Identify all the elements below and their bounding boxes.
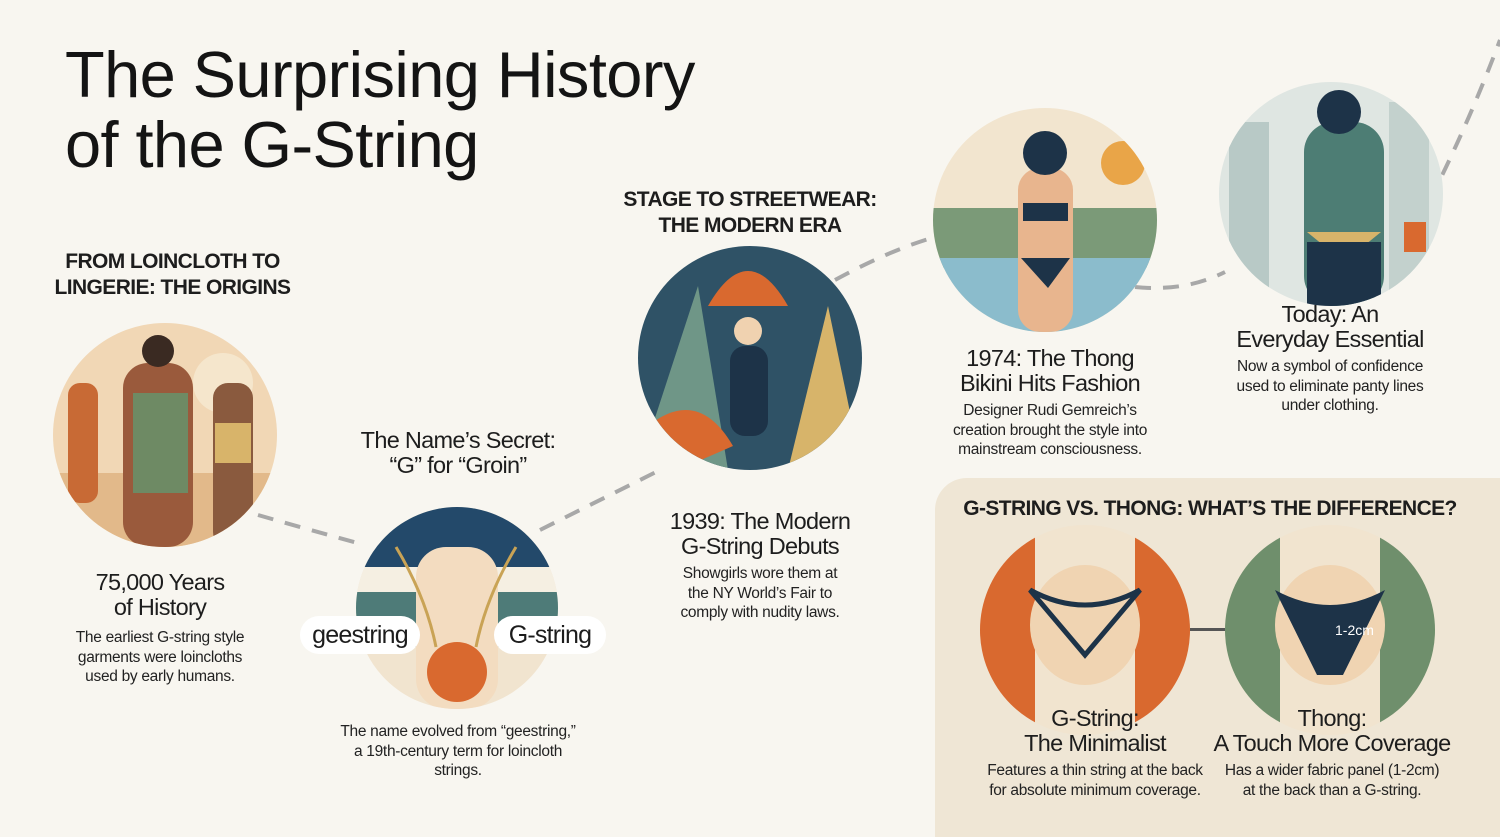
desc: today: under clothing. bbox=[1281, 397, 1379, 414]
label: G-string: G-string bbox=[509, 621, 591, 649]
desc: origins: garments were loincloths bbox=[78, 648, 242, 666]
text: 75,000 years bbox=[96, 569, 224, 620]
heading: origins: FROM LOINCLOTH TO bbox=[65, 250, 280, 273]
desc: name bbox=[340, 723, 576, 779]
desc: origins: The earliest G-string style bbox=[76, 629, 244, 646]
desc: g-string: for absolute minimum coverage. bbox=[989, 782, 1201, 798]
icon: g-string back bbox=[980, 538, 1190, 722]
desc: 1974: mainstream consciousness. bbox=[958, 441, 1142, 458]
panel heading: G-STRING VS. THONG: WHAT’S THE DIFFERENCE? bbox=[963, 497, 1457, 520]
icon: thong back bbox=[1225, 538, 1435, 722]
icon: showgirl circle bbox=[638, 246, 862, 470]
desc: name: strings. bbox=[434, 762, 482, 779]
text: 1939: G-String Debuts bbox=[681, 533, 839, 559]
desc: origins bbox=[76, 629, 244, 685]
text: 1974: 1974: The Thong bbox=[966, 345, 1134, 371]
text: g-string minimalist: G-String: bbox=[1051, 705, 1139, 731]
text: thong coverage: Thong: bbox=[1298, 705, 1366, 731]
desc: thong: at the back than a G-string. bbox=[1243, 782, 1421, 798]
text: today bbox=[1236, 301, 1424, 352]
desc: name: The name evolved from “geestring,” bbox=[340, 723, 576, 740]
desc: name: a 19th-century term for loincloth bbox=[354, 742, 562, 760]
desc: 1974: Designer Rudi Gemreich’s bbox=[963, 402, 1137, 419]
text: 1974 bbox=[960, 345, 1140, 396]
desc: 1939: the NY World’s Fair to bbox=[688, 584, 832, 602]
label: geestring bbox=[300, 616, 420, 654]
text: 1939 bbox=[670, 508, 850, 559]
heading: modern era: THE MODERN ERA bbox=[659, 214, 841, 237]
heading: name's secret: The Name’s Secret: bbox=[361, 427, 555, 453]
text: today: Everyday Essential bbox=[1236, 326, 1424, 352]
desc: today: used to eliminate panty lines bbox=[1237, 378, 1423, 394]
heading: name's secret: “G” for “Groin” bbox=[389, 452, 527, 478]
desc: 1974 bbox=[953, 402, 1147, 458]
icon: today circle bbox=[1219, 82, 1443, 306]
desc: g-string bbox=[987, 762, 1203, 798]
panel: comparison bbox=[935, 478, 1500, 837]
label: G-string bbox=[494, 616, 606, 654]
desc: today bbox=[1237, 358, 1424, 414]
title: The Surprising History bbox=[65, 38, 695, 111]
desc: 1939: comply with nudity laws. bbox=[680, 604, 840, 621]
heading: name's secret bbox=[361, 427, 555, 478]
heading: modern era: STAGE TO STREETWEAR: bbox=[623, 188, 877, 211]
desc: 1974: creation brought the style into bbox=[953, 422, 1147, 438]
label: geestring: geestring bbox=[312, 621, 408, 649]
text: g-string minimalist bbox=[1024, 705, 1166, 756]
text: 75,000 years: of History bbox=[114, 594, 206, 620]
icon: early humans circle bbox=[53, 323, 277, 547]
icon: thong back: 1-2cm bbox=[1335, 622, 1374, 638]
icon: thong bikini circle bbox=[933, 108, 1157, 332]
heading: modern era bbox=[623, 188, 877, 237]
icon: groin circle bbox=[356, 507, 558, 709]
desc: origins: used by early humans. bbox=[85, 668, 235, 685]
heading: origins bbox=[55, 250, 290, 299]
desc: thong bbox=[1225, 762, 1439, 798]
title: of the G-String bbox=[65, 108, 479, 181]
connector line bbox=[1180, 628, 1240, 631]
text: thong coverage bbox=[1214, 705, 1450, 756]
desc: thong: Has a wider fabric panel (1-2cm) bbox=[1225, 762, 1439, 779]
text: g-string minimalist: The Minimalist bbox=[1024, 730, 1166, 756]
text: thong coverage: A Touch More Coverage bbox=[1214, 730, 1450, 756]
title bbox=[65, 38, 696, 181]
heading: origins: LINGERIE: THE ORIGINS bbox=[55, 276, 290, 299]
desc: 1939: Showgirls wore them at bbox=[683, 565, 837, 582]
text: 1974: Bikini Hits Fashion bbox=[960, 370, 1140, 396]
desc: g-string: Features a thin string at the back bbox=[987, 762, 1203, 779]
desc: today: Now a symbol of confidence bbox=[1237, 358, 1423, 375]
text: today: Today: An bbox=[1282, 301, 1378, 327]
desc: 1939 bbox=[680, 565, 840, 621]
text: 1939: 1939: The Modern bbox=[670, 508, 850, 534]
text: 75,000 years: 75,000 Years bbox=[96, 569, 224, 595]
